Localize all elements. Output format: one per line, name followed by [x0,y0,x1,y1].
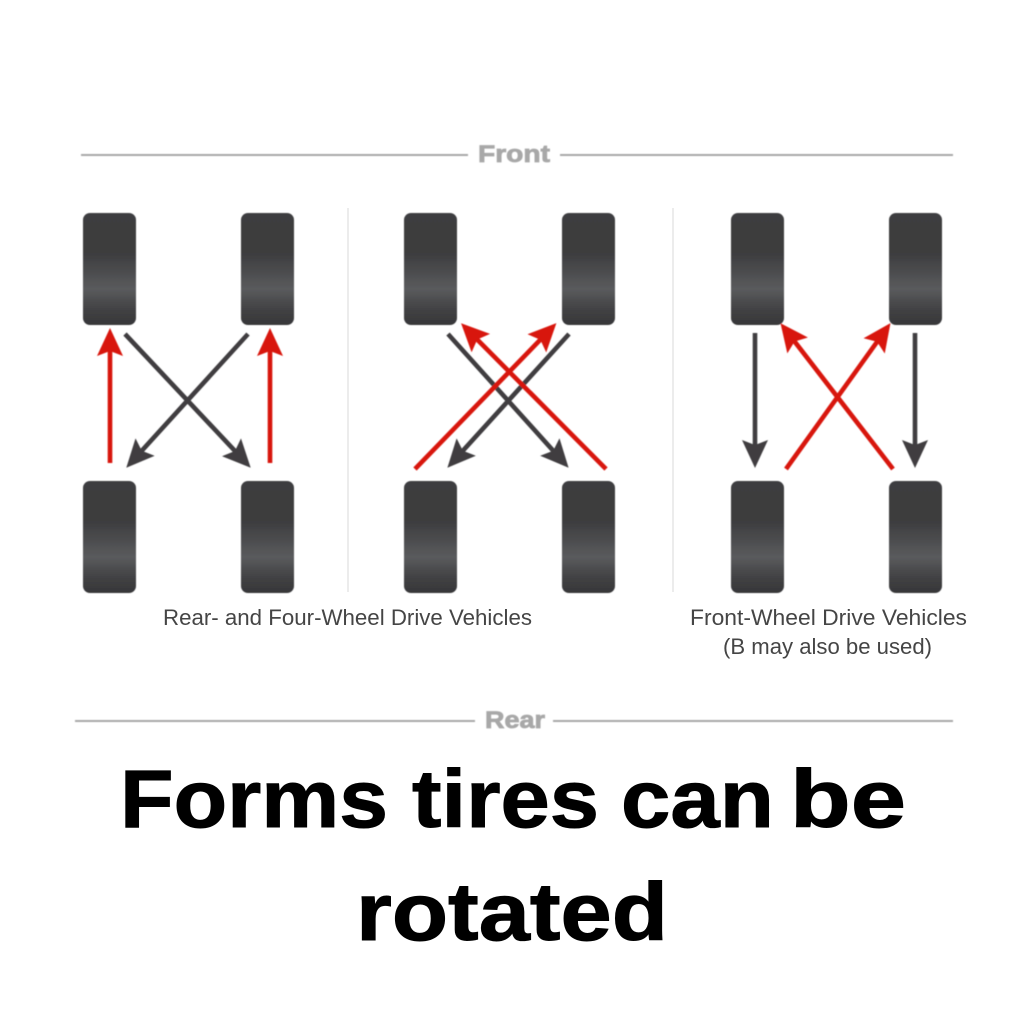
pattern B: X rotation [404,213,615,593]
pattern B arrows [415,328,606,469]
pattern A: rear- and four-wheel drive [83,213,294,593]
pattern C arrows [755,329,915,469]
caption: front-wheel drive [690,605,967,659]
pattern A arrows [110,334,270,463]
pattern C tires [731,213,942,593]
front divider with label: Front [478,141,550,168]
pattern B tires [404,213,615,593]
caption: front-wheel drive: (B may also be used) [723,634,932,659]
caption: rear- and four-wheel drive: Rear- and Four-Wheel Drive Vehicles [163,605,532,630]
title: can [621,754,774,845]
pattern A tires [83,213,294,593]
caption: front-wheel drive: Front-Wheel Drive Vehicles [690,605,967,630]
title [120,754,906,958]
pattern C: front-wheel drive [731,213,942,593]
title: be [790,754,906,845]
title: Forms [120,754,388,845]
rear divider with label: Rear [485,707,545,734]
title: rotated [356,867,668,958]
title: tires [412,754,599,845]
